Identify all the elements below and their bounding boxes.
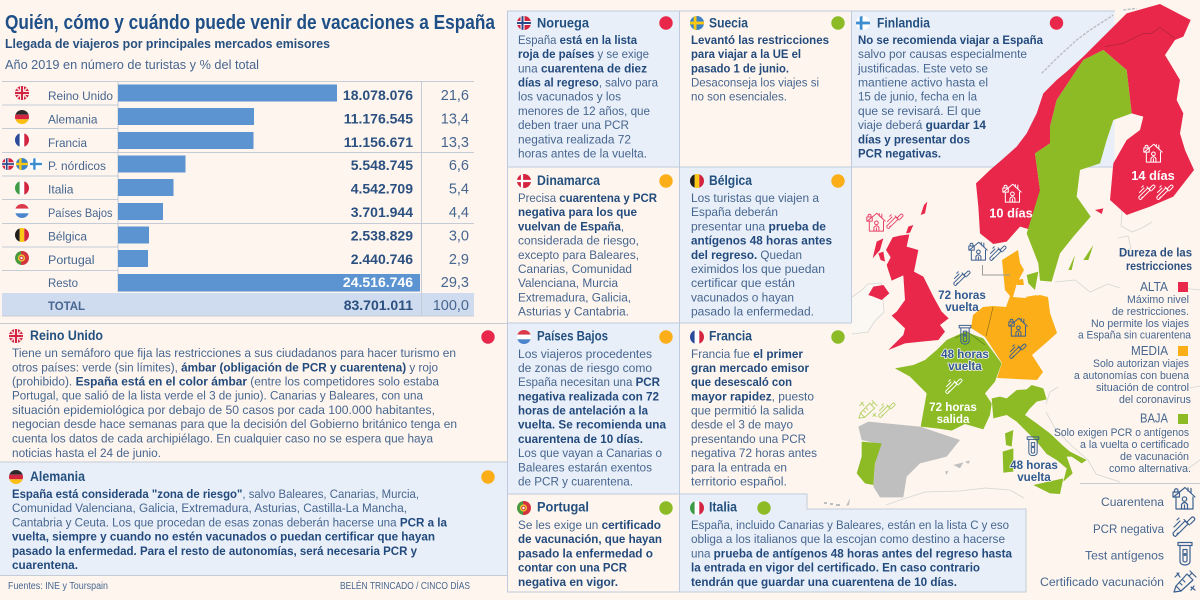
bar chart: tourists by market [2, 81, 474, 316]
label: Italy: vuelta [1017, 471, 1051, 484]
panel: Reino Unido: otros países: verde (sin límites), ámbar (obligación de PCR y cuarentena) y rojo [12, 360, 438, 374]
panel: Alemania: Cantabria y Ceuta. Los que procedan de esas zonas deberán hacerse una PCR a la [12, 516, 447, 530]
panel: Finlandia: PCR negativas. [858, 146, 941, 160]
panel: Dinamarca: Canarias, Comunidad [518, 262, 632, 276]
panel: Noruega: menores de 12 años, que [518, 104, 650, 118]
panel: Italia: la entrada en vigor del certificado. En caso contrario [691, 560, 980, 574]
bar chart: tourists by market: Portugal [48, 253, 94, 267]
panel: Finlandia: mantiene activo hasta el [858, 76, 988, 90]
byline: BELÉN TRINCADO / CINCO DÍAS [340, 581, 470, 592]
legend: restriction severity: a España sin cuarentena [1078, 330, 1192, 342]
panel: Reino Unido: Portugal, que salió de la lista verde el 3 de junio). Canarias y Baleares, con una [12, 389, 423, 403]
panel: Finlandia [852, 11, 1114, 167]
legend: restriction severity: No permite los viajes [1091, 318, 1189, 330]
panel: Dinamarca: considerada de riesgo, [518, 234, 639, 248]
panel: Finlandia: que se revisará. El que [858, 104, 981, 118]
icons: Germany [1009, 318, 1027, 359]
legend: restriction severity: Solo autorizan viajes [1093, 358, 1189, 370]
legend: icons: Certificado vacunación [1040, 575, 1164, 589]
legend: restriction severity: MEDIA [1131, 343, 1168, 358]
bar chart: tourists by market: 13,4 [441, 112, 469, 128]
Norway and Finland (high) [976, 4, 1194, 290]
panel: Francia: que permitió la salida [691, 404, 804, 418]
bar chart: tourists by market: 2.440.746 [351, 251, 413, 267]
panel: Portugal: negativa en vigor. [518, 575, 618, 589]
France, Belgium, Italy, Portugal (low) and Spain [857, 332, 1087, 497]
label: Belgium: 48 horas [941, 348, 989, 361]
bar chart: tourists by market: 24.516.746 [343, 274, 413, 290]
panel: Alemania: cuarentena. [12, 558, 78, 572]
panel: Finlandia: días y presentar dos [858, 132, 970, 146]
bar chart: tourists by market: 4.542.709 [351, 180, 413, 196]
legend: restriction severity: ALTA [1140, 279, 1168, 294]
panel: Países Bajos: negativa realizada con 72 [518, 390, 659, 404]
panel: Portugal: Portugal [537, 500, 589, 515]
bar chart: tourists by market: P. nórdicos [48, 159, 106, 173]
panel: Suecia [680, 11, 852, 167]
panel: Bélgica [680, 167, 852, 323]
label: Netherlands [938, 271, 986, 314]
panel: Países Bajos: Baleares estarán exentos [518, 460, 652, 474]
panel: Italia [680, 494, 1026, 592]
panel: Italia: España, incluido Canarias y Baleares, están en la lista C y eso [691, 518, 1009, 532]
panel: Noruega: Noruega [537, 16, 589, 30]
legend: restriction severity: a autonomías con buena [1074, 370, 1190, 382]
panel: Portugal: contar con una PCR [518, 560, 627, 574]
panel: Francia: mayor rapidez, puesto [691, 390, 814, 404]
panel: Francia: Francia [709, 329, 752, 344]
bar chart: tourists by market: 11.176.545 [344, 110, 413, 126]
bar chart: tourists by market: Países Bajos [48, 206, 112, 220]
legend: restriction severity: como alternativa. [1109, 463, 1191, 475]
panel: Dinamarca [507, 167, 680, 323]
label: Netherlands: vuelta [945, 301, 979, 314]
bar chart: tourists by market: 100,0 [433, 298, 469, 314]
bar chart: tourists by market: 5.548.745 [351, 157, 413, 173]
panel: Dinamarca: Dinamarca [537, 173, 600, 188]
panel: Bélgica: pasado la enfermedad. [691, 304, 814, 318]
panel: Suecia: Suecia [709, 16, 748, 30]
icons: United Kingdom [867, 213, 903, 231]
label: Italy: 48 horas [1010, 459, 1058, 472]
legend: icons: PCR negativa [1093, 522, 1164, 536]
bar chart: tourists by market: Alemania [48, 112, 98, 126]
legend: restriction severity: a la vuelta o certificado [1080, 439, 1189, 451]
panel: Alemania: Comunidad Valenciana, Galicia, Extremadura, Asturias, Castilla-La Mancha, [12, 501, 407, 515]
bar chart: tourists by market: 83.701.011 [344, 297, 413, 313]
title: Quién, cómo y cuándo puede venir de vacaciones a España [5, 12, 496, 34]
legend: restriction severity: BAJA [1140, 410, 1168, 426]
panel: Italia: tendrán que guardar una cuarentena de 10 días. [691, 575, 957, 589]
panel: Noruega: horas antes de la vuelta. [518, 146, 647, 160]
bar chart: tourists by market: Francia [48, 136, 87, 150]
panel: Bélgica: vacunados o hayan [691, 290, 794, 304]
panel: Bélgica: Los turistas que viajen a [691, 191, 819, 205]
panel: Noruega: España está en la lista [518, 33, 637, 47]
United Kingdom (high) [868, 202, 949, 350]
panel: Portugal [507, 494, 680, 592]
bar chart: tourists by market: 4,4 [449, 205, 469, 221]
subtitle: Llegada de viajeros por principales mercados emisores [5, 36, 330, 51]
bar chart: tourists by market: Italia [48, 182, 74, 196]
panel: Reino Unido [0, 323, 507, 462]
panel: Francia: gran mercado emisor [691, 361, 809, 375]
icons and labels: Norway [989, 184, 1033, 220]
panel: Finlandia: salvo por causas especialmente [858, 47, 1027, 61]
panel: Bélgica: presentar una prueba de [691, 220, 826, 234]
panel: Bélgica: del regreso. Quedan [691, 248, 802, 262]
icons: Denmark [969, 242, 1010, 275]
legend: restriction severity: situación de control [1096, 382, 1189, 394]
panel: Noruega: los vacunados y los [518, 90, 621, 104]
legend: icons: Test antígenos [1085, 548, 1164, 562]
panel: Italia: una prueba de antígenos 48 horas antes del regreso hasta [691, 546, 1012, 560]
panel: Italia: Italia [709, 500, 737, 515]
panel: Finlandia: viaje deberá guardar 14 [858, 118, 986, 132]
bar chart: tourists by market: 3,0 [449, 228, 469, 244]
Germany, Netherlands, Denmark (medium) [971, 250, 1057, 380]
bar chart: tourists by market: 6,6 [449, 158, 469, 174]
panel: Bélgica: antígenos 48 horas antes [691, 234, 832, 248]
panel: Países Bajos: vuelta. Se recomienda una [518, 418, 666, 432]
panel: Alemania [0, 462, 507, 576]
panel: Portugal: de vacunación, que hayan [518, 532, 662, 546]
label: France: salida [937, 413, 970, 426]
bar chart: tourists by market: 18.078.076 [343, 87, 413, 103]
bar chart: tourists by market: Bélgica [48, 230, 87, 244]
legend: icons [1040, 484, 1200, 592]
panel: Francia: desde el 3 de mayo [691, 418, 793, 432]
panel: Alemania: vuelta, siempre y cuando no estén vacunados o puedan certificar que hayan [12, 530, 435, 544]
label: Belgium [941, 325, 989, 373]
bar chart: tourists by market: TOTAL [48, 299, 86, 313]
bar chart: tourists by market: 5,4 [449, 182, 469, 198]
panel: Francia: presentando una PCR [691, 432, 806, 446]
panel: Países Bajos: Los viajeros procedentes [518, 347, 652, 361]
icons and labels: Finland: 14 días [1131, 168, 1175, 183]
panel: Países Bajos: de zonas de riesgo como [518, 361, 652, 375]
panel: Dinamarca: Extremadura, Galicia, [518, 290, 631, 304]
panel: Alemania: Alemania [30, 469, 85, 484]
panel: Países Bajos: Países Bajos [537, 329, 608, 344]
bar chart: tourists by market: 29,3 [441, 275, 469, 291]
bar chart: tourists by market: 2,9 [449, 252, 469, 268]
panel: Finlandia: No se recomienda viajar a España [858, 33, 1043, 47]
bar chart: tourists by market: Resto [48, 276, 78, 290]
unit note: Año 2019 en número de turistas y % del total [5, 57, 259, 72]
panel: Francia [680, 323, 852, 494]
icons and labels: Finland [1131, 144, 1175, 200]
panel: Dinamarca: Asturias y Cantabria. [518, 304, 629, 318]
Canary Islands [824, 498, 850, 506]
panel: Reino Unido: negocian desde hace semanas para que la decisión del Gobierno británico tenga en [12, 417, 457, 431]
legend: restriction severity: del coronavirus [1119, 394, 1191, 406]
label: Belgium: vuelta [948, 360, 982, 373]
bar chart: tourists by market: Reino Unido [48, 89, 113, 103]
panel: Noruega: deben traer una PCR [518, 118, 629, 132]
panel: Países Bajos: de PCR y cuarentena. [518, 474, 633, 488]
panel: Noruega: días al regreso, salvo para [518, 76, 658, 90]
panel: Reino Unido: (prohibido). España está en el color ámbar (entre los competidores solo estaba [12, 374, 439, 388]
bar chart: tourists by market: 2.538.829 [351, 228, 413, 244]
legend: restriction severity: de vacunación [1120, 451, 1189, 463]
panel: Reino Unido: situación epidemiológica por debajo de 50 casos por cada 100.000 habitantes, [12, 403, 435, 417]
panel: Francia: negativa 72 horas antes [691, 446, 817, 460]
legend: restriction severity: Máximo nivel [1127, 294, 1189, 306]
panel: Reino Unido: noticias hasta el 24 de junio. [12, 446, 161, 460]
sources: Fuentes: INE y Tourspain [8, 581, 108, 592]
panel: Noruega: una cuarentena de diez [518, 62, 647, 76]
icons and labels: Norway: 10 días [989, 206, 1033, 220]
panel: Bélgica: España deberán [691, 205, 778, 219]
panel: Países Bajos: Los que vayan a Canarias o [518, 446, 662, 460]
legend: restriction severity [1054, 246, 1192, 475]
Sweden (low) [1027, 50, 1132, 282]
bar chart: tourists by market: 21,6 [441, 88, 469, 104]
bar chart: tourists by market: 13,3 [441, 135, 469, 151]
map of Europe by restriction level [824, 4, 1200, 506]
panel: Suecia: para viajar a la UE el [691, 47, 801, 61]
panel: Reino Unido: cuenta los datos de cada archipiélago. En cualquier caso no se espera que haya [12, 432, 433, 446]
legend: restriction severity: Dureza de las [1119, 246, 1192, 260]
panel: Bélgica: eximidos los que puedan [691, 262, 825, 276]
panel: Suecia: Desaconseja los viajes si [691, 76, 819, 90]
icons: Portugal [859, 401, 895, 418]
label: Netherlands: 72 horas [938, 289, 986, 302]
panel: Dinamarca: Valenciana, Murcia [518, 276, 618, 290]
panel: Países Bajos [507, 323, 680, 494]
panel: Dinamarca: negativa para los que [518, 205, 637, 219]
label: France [929, 379, 977, 426]
panel: Reino Unido: Reino Unido [30, 328, 103, 343]
panel: Noruega: negativa realizada 72 [518, 132, 631, 146]
panel: Noruega [507, 11, 680, 167]
panel: Suecia: Levantó las restricciones [691, 33, 829, 47]
panel: Finlandia: justificadas. Este veto se [857, 62, 988, 76]
panel: Alemania: pasado la enfermedad. Para el resto de autonomías, será necesaria PCR y [12, 544, 417, 558]
panel: Bélgica: certificar que están [691, 276, 795, 290]
panel: Dinamarca: excepto para Baleares, [518, 248, 639, 262]
label: France: 72 horas [929, 401, 977, 414]
panel: Bélgica: Bélgica [709, 173, 752, 188]
panel: Dinamarca: Precisa cuarentena y PCR [518, 191, 657, 205]
panel: Portugal: pasado la enfermedad o [518, 546, 653, 560]
panel: Dinamarca: vuelvan de España, [518, 220, 624, 234]
panel: Noruega: roja de países y se exige [518, 47, 649, 61]
panel: Finlandia: Finlandia [877, 16, 930, 30]
panel: Alemania: España está considerada "zona de riesgo", salvo Baleares, Canarias, Murcia, [12, 487, 419, 501]
panel: Países Bajos: cuarentena de 10 días. [518, 432, 643, 446]
panel: Francia: que desescaló con [691, 375, 792, 389]
label: Italy [1010, 437, 1058, 484]
panel: Países Bajos: España necesitan una PCR [518, 375, 660, 389]
panel: Francia: territorio español. [691, 474, 787, 488]
bar chart: tourists by market: 11.156.671 [344, 134, 413, 150]
panel: Portugal: Se les exige un certificado [518, 518, 661, 532]
panel: Suecia: pasado 1 de junio. [691, 62, 789, 76]
panel: Países Bajos: horas de antelación a la [518, 404, 648, 418]
panel: Reino Unido: Tiene un semáforo que fija las restricciones a sus ciudadanos para hacer turismo en [12, 346, 456, 360]
panel: Suecia: no son esenciales. [691, 90, 787, 104]
panel: Francia: para la entrada en [691, 460, 787, 474]
panel: Finlandia: 15 de junio, fecha en la [858, 90, 977, 104]
coastlines of neighbouring countries [852, 200, 1200, 505]
legend: restriction severity: de restricciones. [1112, 306, 1189, 318]
panel: Italia: obliga a los italianos que la escojan como destino a hacerse [691, 532, 1005, 546]
panel: Francia: Francia fue el primer [691, 347, 803, 361]
legend: restriction severity: Solo exigen PCR o antígenos [1054, 427, 1189, 439]
bar chart: tourists by market: 3.701.944 [351, 204, 413, 220]
legend: icons: Cuarentena [1101, 495, 1164, 509]
